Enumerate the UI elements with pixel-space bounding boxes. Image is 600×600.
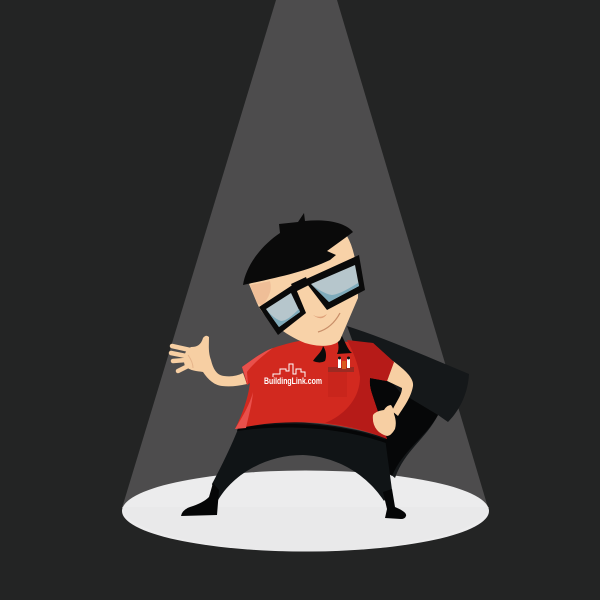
logo text: BuildingLink.com xyxy=(264,376,322,386)
legs and trousers xyxy=(212,422,392,502)
left boot xyxy=(181,483,219,516)
left arm and hand xyxy=(171,336,247,386)
logo xyxy=(264,364,322,386)
glasses xyxy=(259,255,365,335)
spotlight beam xyxy=(122,0,489,511)
collar right strand xyxy=(336,336,352,354)
fist xyxy=(373,405,396,436)
smile xyxy=(318,313,340,332)
nose xyxy=(313,314,327,318)
right boot xyxy=(383,489,406,519)
red shirt xyxy=(235,340,394,439)
left pupil xyxy=(293,306,297,314)
left lens lower tint xyxy=(266,309,300,327)
left frame xyxy=(259,284,306,335)
ear-side face shade xyxy=(250,281,271,306)
cape xyxy=(347,326,469,478)
logo skyline xyxy=(273,364,305,377)
waist shadow xyxy=(237,424,386,443)
shirt pocket xyxy=(328,370,347,397)
glasses bridge xyxy=(291,277,309,292)
shirt right shading xyxy=(325,340,394,439)
collar left strand xyxy=(313,346,326,362)
left lens xyxy=(266,293,300,327)
right lens xyxy=(311,265,359,302)
head xyxy=(243,213,365,346)
floor light pool xyxy=(122,470,489,552)
face xyxy=(249,236,358,346)
right arm xyxy=(385,361,413,416)
right frame xyxy=(304,255,365,310)
pocket flap xyxy=(328,367,354,372)
hair xyxy=(243,213,353,285)
right lens lower tint xyxy=(311,283,359,302)
right pupil xyxy=(344,279,349,288)
shirt left highlight xyxy=(235,348,273,429)
pens in pocket xyxy=(338,356,350,369)
